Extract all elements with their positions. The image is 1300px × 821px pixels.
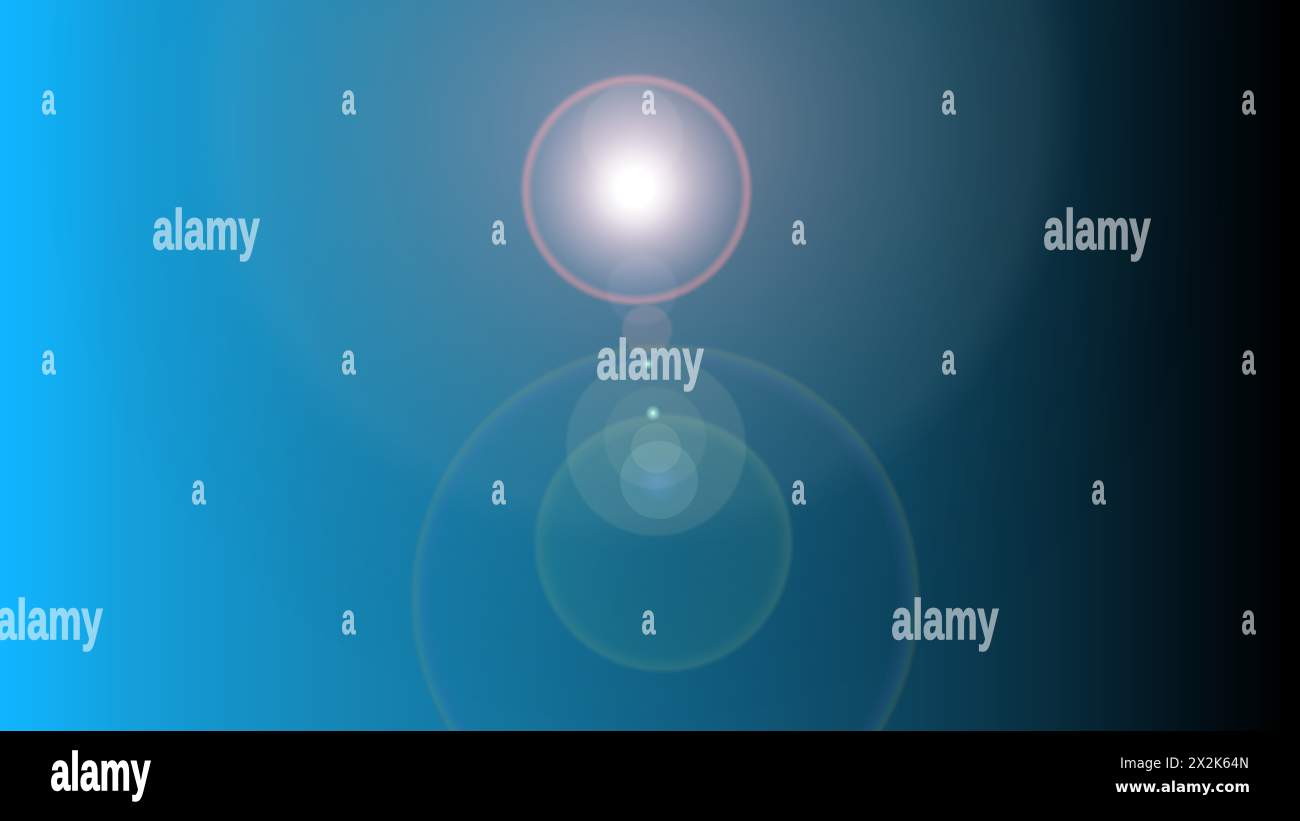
watermark row 2: a xyxy=(792,205,806,254)
watermark row 3: a xyxy=(942,335,956,384)
rainbow ring xyxy=(411,344,920,731)
watermark row 4: a xyxy=(492,465,506,514)
watermark row 4 xyxy=(192,465,1106,514)
watermark row 1 xyxy=(42,75,1256,124)
lower sparkle xyxy=(646,406,660,420)
blue ghost disc xyxy=(620,441,698,519)
small ghost disc xyxy=(631,423,681,473)
watermark repeated letters and wordmarks xyxy=(0,75,1256,652)
image id: Image ID: 2X2K64N xyxy=(1120,756,1249,772)
watermark row 1: a xyxy=(942,75,956,124)
upper ghost disc xyxy=(589,86,676,114)
large teal disc xyxy=(532,412,794,674)
watermark wordmark right: alamy xyxy=(1044,198,1151,262)
watermark row 3: a xyxy=(1242,335,1256,384)
soft top glow xyxy=(256,0,1028,507)
watermark row 4: a xyxy=(1092,465,1106,514)
large halo disc xyxy=(216,0,1048,516)
light source core xyxy=(527,80,745,298)
watermark row 1: a xyxy=(342,75,356,124)
bottom bar xyxy=(0,731,1300,821)
medium ghost disc xyxy=(566,356,746,536)
watermark row 5: a xyxy=(342,595,356,644)
watermark row 1: a xyxy=(1242,75,1256,124)
watermark row 1: a xyxy=(642,75,656,124)
watermark wordmark centre: alamy xyxy=(596,328,704,392)
inner ghost disc xyxy=(604,387,706,489)
watermark row 3: a xyxy=(342,335,356,384)
lens flare xyxy=(208,0,1062,731)
watermark wordmark lower left: alamy xyxy=(0,588,103,652)
watermark row 1: a xyxy=(42,75,56,124)
watermark row 2: a xyxy=(492,205,506,254)
rose ghost disc xyxy=(622,305,672,355)
watermark row 5 xyxy=(342,595,1256,644)
watermark row 2 xyxy=(492,205,806,254)
watermark row 4: a xyxy=(192,465,206,514)
watermark row 5: a xyxy=(642,595,656,644)
watermark row 4: a xyxy=(792,465,806,514)
pink ring xyxy=(518,72,754,308)
watermark wordmark lower right: alamy xyxy=(892,588,999,652)
watermark row 3 xyxy=(42,335,1256,384)
website: www.alamy.com xyxy=(1115,778,1250,796)
watermark row 3: a xyxy=(42,335,56,384)
watermark row 5: a xyxy=(1242,595,1256,644)
alamy logo: alamy xyxy=(50,742,150,802)
upper sparkle xyxy=(643,358,653,370)
watermark wordmark left: alamy xyxy=(152,198,260,262)
lavender ghost disc xyxy=(608,270,676,324)
